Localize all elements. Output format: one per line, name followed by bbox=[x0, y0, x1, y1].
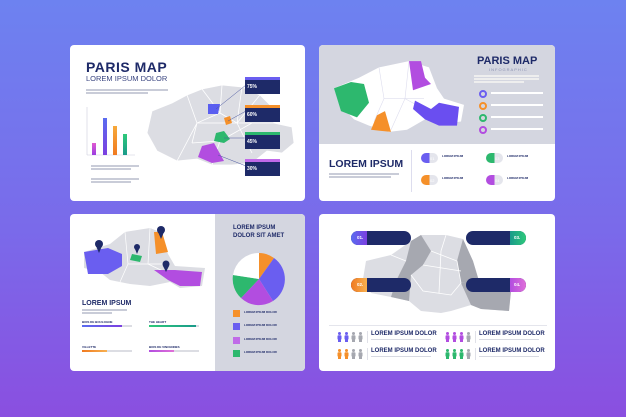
progress bars bbox=[82, 320, 199, 352]
callout boxes: 45% bbox=[247, 139, 257, 145]
subtitle: INFOGRAPHIC bbox=[489, 67, 528, 72]
pie chart bbox=[232, 253, 285, 306]
heading dolor sit amet: LOREM IPSUM bbox=[233, 225, 275, 231]
numbered pills: LOREM IPSUM bbox=[507, 154, 528, 158]
legend: LOREM IPSUM DOLOR bbox=[244, 350, 277, 354]
people rows bbox=[337, 330, 545, 360]
callout 03: 03. bbox=[514, 235, 520, 240]
callout boxes bbox=[245, 77, 280, 176]
legend: LOREM IPSUM DOLOR bbox=[244, 337, 277, 341]
gray right side bbox=[215, 214, 305, 371]
heading dolor sit amet: DOLOR SIT AMET bbox=[233, 233, 284, 239]
progress bars: BOIS DE VINCENNES bbox=[149, 345, 180, 349]
people rows: LOREM IPSUM DOLOR bbox=[479, 331, 545, 337]
callout boxes: 75% bbox=[247, 84, 257, 90]
numbered pills: LOREM IPSUM bbox=[442, 176, 463, 180]
callout 01 bbox=[351, 231, 411, 245]
map bbox=[334, 61, 464, 132]
map bbox=[148, 86, 294, 166]
callout 04: 04. bbox=[514, 282, 520, 287]
panel: paris map bar chart bbox=[70, 45, 305, 201]
progress bars: BOIS DE BOULOGNE bbox=[82, 320, 113, 324]
text block bbox=[86, 89, 168, 94]
subtitle: LOREM IPSUM DOLOR bbox=[86, 74, 167, 83]
callout 03 bbox=[466, 231, 526, 245]
title: PARIS MAP bbox=[477, 55, 537, 67]
numbered pills: 01 bbox=[430, 156, 434, 161]
callout 04 bbox=[466, 278, 526, 292]
ring list bbox=[479, 90, 543, 134]
callout boxes: 60% bbox=[247, 112, 257, 118]
numbered pills: 02 bbox=[430, 178, 434, 183]
panel: numbered map and people bbox=[319, 214, 555, 371]
callout 02 bbox=[351, 278, 411, 292]
numbered pills: LOREM IPSUM bbox=[442, 154, 463, 158]
heading dolor sit amet bbox=[233, 224, 284, 239]
callout boxes: 30% bbox=[247, 166, 257, 172]
progress bars: VILLETTE bbox=[82, 345, 96, 349]
numbered pills: 03 bbox=[495, 156, 499, 161]
callout 02: 02. bbox=[357, 282, 363, 287]
map bbox=[363, 235, 511, 313]
numbered pills: 04 bbox=[495, 178, 499, 183]
numbered pills: LOREM IPSUM bbox=[507, 176, 528, 180]
people rows: LOREM IPSUM DOLOR bbox=[371, 348, 437, 354]
gray header area bbox=[319, 45, 555, 144]
numbered pills bbox=[421, 153, 528, 185]
panel: pins map and pie bbox=[70, 214, 305, 371]
legend bbox=[233, 310, 277, 357]
panel: paris map infographic bbox=[319, 45, 555, 201]
title: PARIS MAP bbox=[86, 59, 167, 75]
map with pins bbox=[84, 226, 205, 288]
bar chart bbox=[86, 107, 135, 156]
bullet notes bbox=[91, 165, 139, 183]
people rows: LOREM IPSUM DOLOR bbox=[479, 348, 545, 354]
heading: lorem ipsum: LOREM IPSUM bbox=[329, 158, 403, 170]
people rows: LOREM IPSUM DOLOR bbox=[371, 331, 437, 337]
callout 01: 01. bbox=[357, 235, 363, 240]
heading lorem ipsum: LOREM IPSUM bbox=[82, 300, 131, 307]
legend: LOREM IPSUM DOLOR bbox=[244, 310, 277, 314]
progress bars: THE HEART bbox=[149, 320, 166, 324]
legend: LOREM IPSUM DOLOR bbox=[244, 323, 277, 327]
